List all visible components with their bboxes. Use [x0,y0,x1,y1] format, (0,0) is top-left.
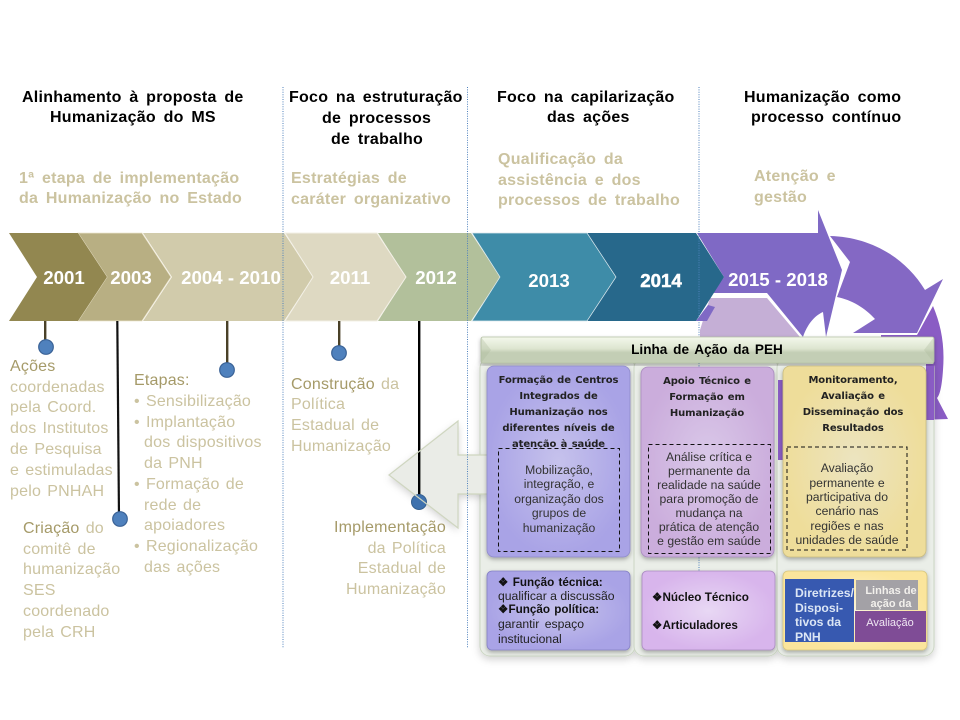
subheading: qualificação: assistência e dos [498,172,641,189]
year: 2014: 2014 [640,270,682,291]
heading: estruturação: de processos [322,110,431,127]
heading: estruturação: Foco na estruturação [289,89,463,106]
box: linhas de ação: Linhas de [865,585,917,597]
text: criação do comitê: Criação [23,520,80,537]
text: implementação da política: Humanização [346,581,446,598]
text: etapas: Etapas: [134,372,190,389]
year: 2003: 2003 [110,267,152,288]
card title: atenção à saúde [512,438,605,450]
box: avaliação [855,611,926,642]
heading: capilarização: das ações [547,109,630,126]
text: construção da política: Política [291,396,345,413]
heading: alinhamento: Alinhamento à proposta de [22,89,244,106]
text: etapas: • Implantação [134,414,235,431]
text: ações coordenadas: de Pesquisa [10,441,102,458]
text: criação do comitê: humanização [23,561,120,578]
year: 2013: 2013 [528,270,570,291]
subheading: 1ª etapa: da Humanização no Estado [19,190,242,207]
card: apoio técnico [641,367,774,557]
card body: integração, e [524,477,594,491]
card title: Integrados de [519,391,598,402]
card title: Monitoramento, [808,375,898,386]
marker: 2012 [412,321,426,510]
text: construção da política: Estadual de [291,417,379,434]
chevron: 2001 [9,233,107,321]
card body: mudança na [675,506,743,520]
text: etapas: da PNH [144,455,203,472]
text: ações coordenadas: e estimuladas [10,462,113,479]
card: funções: qualificar a discussão [498,589,615,603]
dashed box [498,448,620,552]
subheading: qualificação: Qualificação da [498,151,623,168]
card: formação de centros [487,366,630,557]
chevron: 2013 [472,233,616,321]
box: linhas de ação [856,580,918,610]
text: criação do comitê: comitê de [23,541,96,558]
box: diretrizes: tivos da [795,615,841,629]
box: linhas de ação: ação da [871,598,912,610]
subheading: estratégias: Estratégias de [291,170,407,187]
card body: e gestão em saúde [657,534,761,548]
text: ações coordenadas: pelo PNHAH [10,483,104,500]
card title: Formação de Centros [499,375,618,386]
dotted period dividers [283,87,699,648]
card: núcleo técnico: ❖Núcleo Técnico [652,591,749,604]
card: funções: institucional [498,632,562,646]
chevron: 2004 - 2010 [143,233,313,321]
box: diretrizes: Disposi- [795,601,843,615]
text: construção da política: Construção [291,376,375,393]
title bar: linha de ação: Linha de Ação da PEH [631,342,783,357]
card body: Mobilização, [525,463,593,477]
subheading: 1ª etapa: 1ª etapa de implementação [19,170,239,187]
text: ações coordenadas: coordenadas [10,379,105,396]
text: criação do comitê: do [80,520,104,537]
card body: cenário nas [815,504,879,518]
card body: Avaliação [821,461,874,475]
heading: processo contínuo: Humanização como [744,89,901,106]
year: 2012: 2012 [415,267,457,288]
title bar: linha de ação [481,337,934,363]
year: 2001: 2001 [43,267,85,288]
heading: estruturação: de trabalho [331,131,423,148]
heading: alinhamento: Humanização do MS [50,109,216,126]
card title: Humanização [670,408,744,419]
card: funções [487,571,630,650]
card title: Apoio Técnico e [663,375,751,387]
chevron: 2011 [285,233,406,321]
panel: background columns [480,358,934,656]
subheading: atenção e gestão: gestão [754,189,807,206]
text: ações coordenadas: dos Institutos [10,420,109,437]
chevron: 2012 [378,233,500,321]
text: ações coordenadas: Ações [10,358,55,375]
year: 2015 - 2018: 2015 - 2018 [728,269,828,290]
dashed box [787,447,907,550]
year: 2004 - 2010: 2004 - 2010 [181,267,281,288]
text: construção da política: Humanização [291,438,391,455]
card body: realidade na saúde [657,478,761,492]
card title: Avaliação e [821,391,885,402]
dashed box [648,444,770,554]
text: etapas: dos dispositivos [144,434,262,451]
text: etapas: apoiadores [144,517,225,534]
card title: Formação em [669,392,745,403]
card title: Humanização nos [509,407,608,418]
chevron: 2003 [78,233,171,321]
text: construção da política: da [375,376,399,393]
card body: participativa do [806,490,888,504]
card body: grupos de [532,506,586,520]
marker: 2003 [113,321,127,526]
card body: prática de atenção [659,520,759,534]
card: núcleo técnico: ❖Articuladores [652,619,738,632]
card body: permanente da [668,464,750,478]
subheading: qualificação: processos de trabalho [498,192,680,209]
card: núcleo técnico [642,571,775,650]
card: monitoramento [783,366,926,557]
text: etapas: rede de [144,497,201,514]
text: criação do comitê: SES [23,582,56,599]
text: criação do comitê: pela CRH [23,624,95,641]
text: implementação da política: Estadual de [358,560,446,577]
card body: permanente e [809,476,885,490]
card body: para promoção de [660,492,759,506]
subheading: estratégias: caráter organizativo [291,191,451,208]
card title: diferentes níveis de [502,422,615,434]
text: etapas: • Formação de [134,476,244,493]
box: diretrizes: PNH [795,630,821,644]
box: avaliação: Avaliação [866,617,914,629]
card: funções: ❖Função política: [498,603,599,616]
card body: regiões e nas [810,519,884,533]
box: diretrizes [785,579,855,644]
text: ações coordenadas: pela Coord. [10,399,96,416]
text: implementação da política: Implementação [334,519,446,536]
year: 2011: 2011 [330,267,370,288]
card: diretrizes e linhas [783,571,927,650]
card: funções: garantir espaço [498,617,584,631]
card body: organização dos [514,492,604,506]
text: etapas: • Regionalização [134,538,258,555]
text: etapas: das ações [144,559,220,576]
heading: capilarização: Foco na capilarização [497,89,675,106]
card body: Análise crítica e [666,450,752,464]
box: diretrizes: Diretrizes/ [795,586,855,600]
text: implementação da política: da Política [368,540,446,557]
text: criação do comitê: coordenado [23,603,110,620]
card body: humanização [523,521,595,535]
arrow: large pale left arrow [389,421,487,528]
subheading: atenção e gestão: Atenção e [754,168,836,185]
card body: unidades de saúde [795,533,899,547]
icon: circular process arrows [696,210,948,420]
card title: Resultados [822,423,884,434]
chevron: 2014 [587,233,724,321]
marker: 2001 [39,321,53,354]
card title: Disseminação dos [803,407,903,418]
text: etapas: • Sensibilização [134,393,251,410]
marker: 2011 [332,321,346,360]
marker: 2004 - 2010 [220,321,234,377]
heading: processo contínuo: processo contínuo [751,109,901,126]
card: funções: ❖ Função técnica: [498,576,603,589]
